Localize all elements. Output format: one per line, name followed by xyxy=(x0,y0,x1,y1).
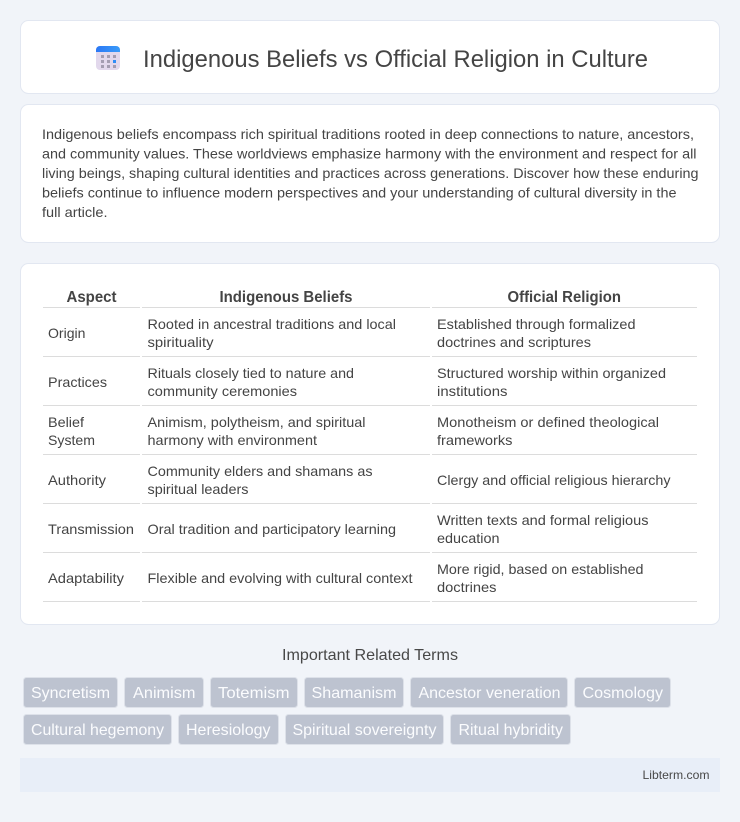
table row: Authority xyxy=(43,463,697,504)
tag: Shamanism xyxy=(304,678,404,708)
panel: introduction xyxy=(20,104,720,242)
table row: Adaptability: doctrines xyxy=(437,579,496,595)
table row: Origin: Rooted in ancestral traditions and local xyxy=(148,316,396,332)
table row: Belief System: System xyxy=(48,432,95,448)
heading: important related terms: Important Related Terms xyxy=(282,647,458,664)
table row: Origin: Origin xyxy=(48,325,86,341)
table header row: Indigenous Beliefs xyxy=(220,289,353,306)
table row: Belief System: frameworks xyxy=(437,432,512,448)
tag: Animism: Animism xyxy=(133,685,196,702)
tag: Syncretism xyxy=(24,678,118,708)
table row: Origin: Established through formalized xyxy=(437,316,636,332)
text block: introduction paragraph: living beings, shaping cultural identities and practices across generations. Discover how these enduring xyxy=(42,165,698,181)
table row: Transmission xyxy=(43,512,697,553)
table row: Adaptability: Flexible and evolving with cultural context xyxy=(148,570,413,586)
text block: introduction paragraph: and community values. These worldviews emphasize harmony with the environment and respect for all xyxy=(42,146,696,162)
table row: Belief System xyxy=(43,414,697,455)
tag: Totemism: Totemism xyxy=(218,685,290,702)
title: Indigenous Beliefs vs Official Religion in Culture xyxy=(143,46,648,73)
text block: introduction paragraph xyxy=(42,126,698,220)
table row: Adaptability: Adaptability xyxy=(48,570,124,586)
table row: Belief System: Belief xyxy=(48,414,84,430)
table row: Practices xyxy=(43,365,697,406)
table row: Origin: spirituality xyxy=(148,334,214,350)
table row: Origin: doctrines and scriptures xyxy=(437,334,591,350)
footer xyxy=(20,758,720,792)
text block: introduction paragraph: Indigenous beliefs encompass rich spiritual traditions rooted in deep connections to nature, ancestors, xyxy=(42,126,694,142)
table row: Authority: Clergy and official religious hierarchy xyxy=(437,472,670,488)
tag: Heresiology: Heresiology xyxy=(186,722,270,739)
tag: Spiritual sovereignty: Spiritual sovereignty xyxy=(292,722,436,739)
tag list: related terms xyxy=(24,678,670,744)
tag: Spiritual sovereignty xyxy=(286,714,444,744)
tag: Heresiology xyxy=(178,714,278,744)
text block: introduction paragraph: full article. xyxy=(42,204,108,220)
table row: Adaptability: More rigid, based on established xyxy=(437,561,644,577)
tag: Ancestor veneration xyxy=(410,678,568,708)
table row: Authority: Authority xyxy=(48,472,106,488)
tag: Totemism xyxy=(210,678,298,708)
table row: Transmission: Oral tradition and participatory learning xyxy=(148,521,396,537)
table header row: Aspect xyxy=(66,289,117,306)
tag: Cultural hegemony xyxy=(24,714,172,744)
table header row xyxy=(43,289,697,308)
panel: comparison table xyxy=(20,264,720,624)
table row: Practices: community ceremonies xyxy=(148,383,297,399)
tag: Cultural hegemony: Cultural hegemony xyxy=(31,722,164,739)
table row: Belief System: Animism, polytheism, and spiritual xyxy=(148,414,366,430)
table row: Practices: institutions xyxy=(437,383,508,399)
panel: header xyxy=(20,20,720,94)
table row: Belief System: Monotheism or defined theological xyxy=(437,414,659,430)
tag: Ritual hybridity: Ritual hybridity xyxy=(458,722,563,739)
table row: Authority: spiritual leaders xyxy=(148,481,248,497)
tag: Shamanism: Shamanism xyxy=(312,685,396,702)
tag: Cosmology xyxy=(574,678,670,708)
tag: Ancestor veneration: Ancestor veneration xyxy=(418,685,560,702)
table row: Adaptability xyxy=(43,561,697,602)
table row: Transmission: Transmission xyxy=(48,521,134,537)
tag: Animism xyxy=(124,678,204,708)
table row: Belief System: harmony with environment xyxy=(148,432,317,448)
table row: Origin xyxy=(43,316,697,357)
table header row: Official Religion xyxy=(508,289,621,306)
table row: Practices: Practices xyxy=(48,374,107,390)
table row: Practices: Structured worship within organized xyxy=(437,365,666,381)
footer credit: Libterm.com xyxy=(642,768,710,782)
table row: Practices: Rituals closely tied to nature and xyxy=(148,365,354,381)
text block: introduction paragraph: beliefs continue to influence modern perspectives and your understanding of cultural diversity in the xyxy=(42,184,677,200)
icon: calendar xyxy=(96,46,120,70)
tag: Syncretism: Syncretism xyxy=(31,685,110,702)
table row: Authority: Community elders and shamans as xyxy=(148,463,372,479)
table row: Transmission: education xyxy=(437,530,500,546)
table row: Transmission: Written texts and formal religious xyxy=(437,512,648,528)
tag: Ritual hybridity xyxy=(450,714,570,744)
tag: Cosmology: Cosmology xyxy=(582,685,663,702)
